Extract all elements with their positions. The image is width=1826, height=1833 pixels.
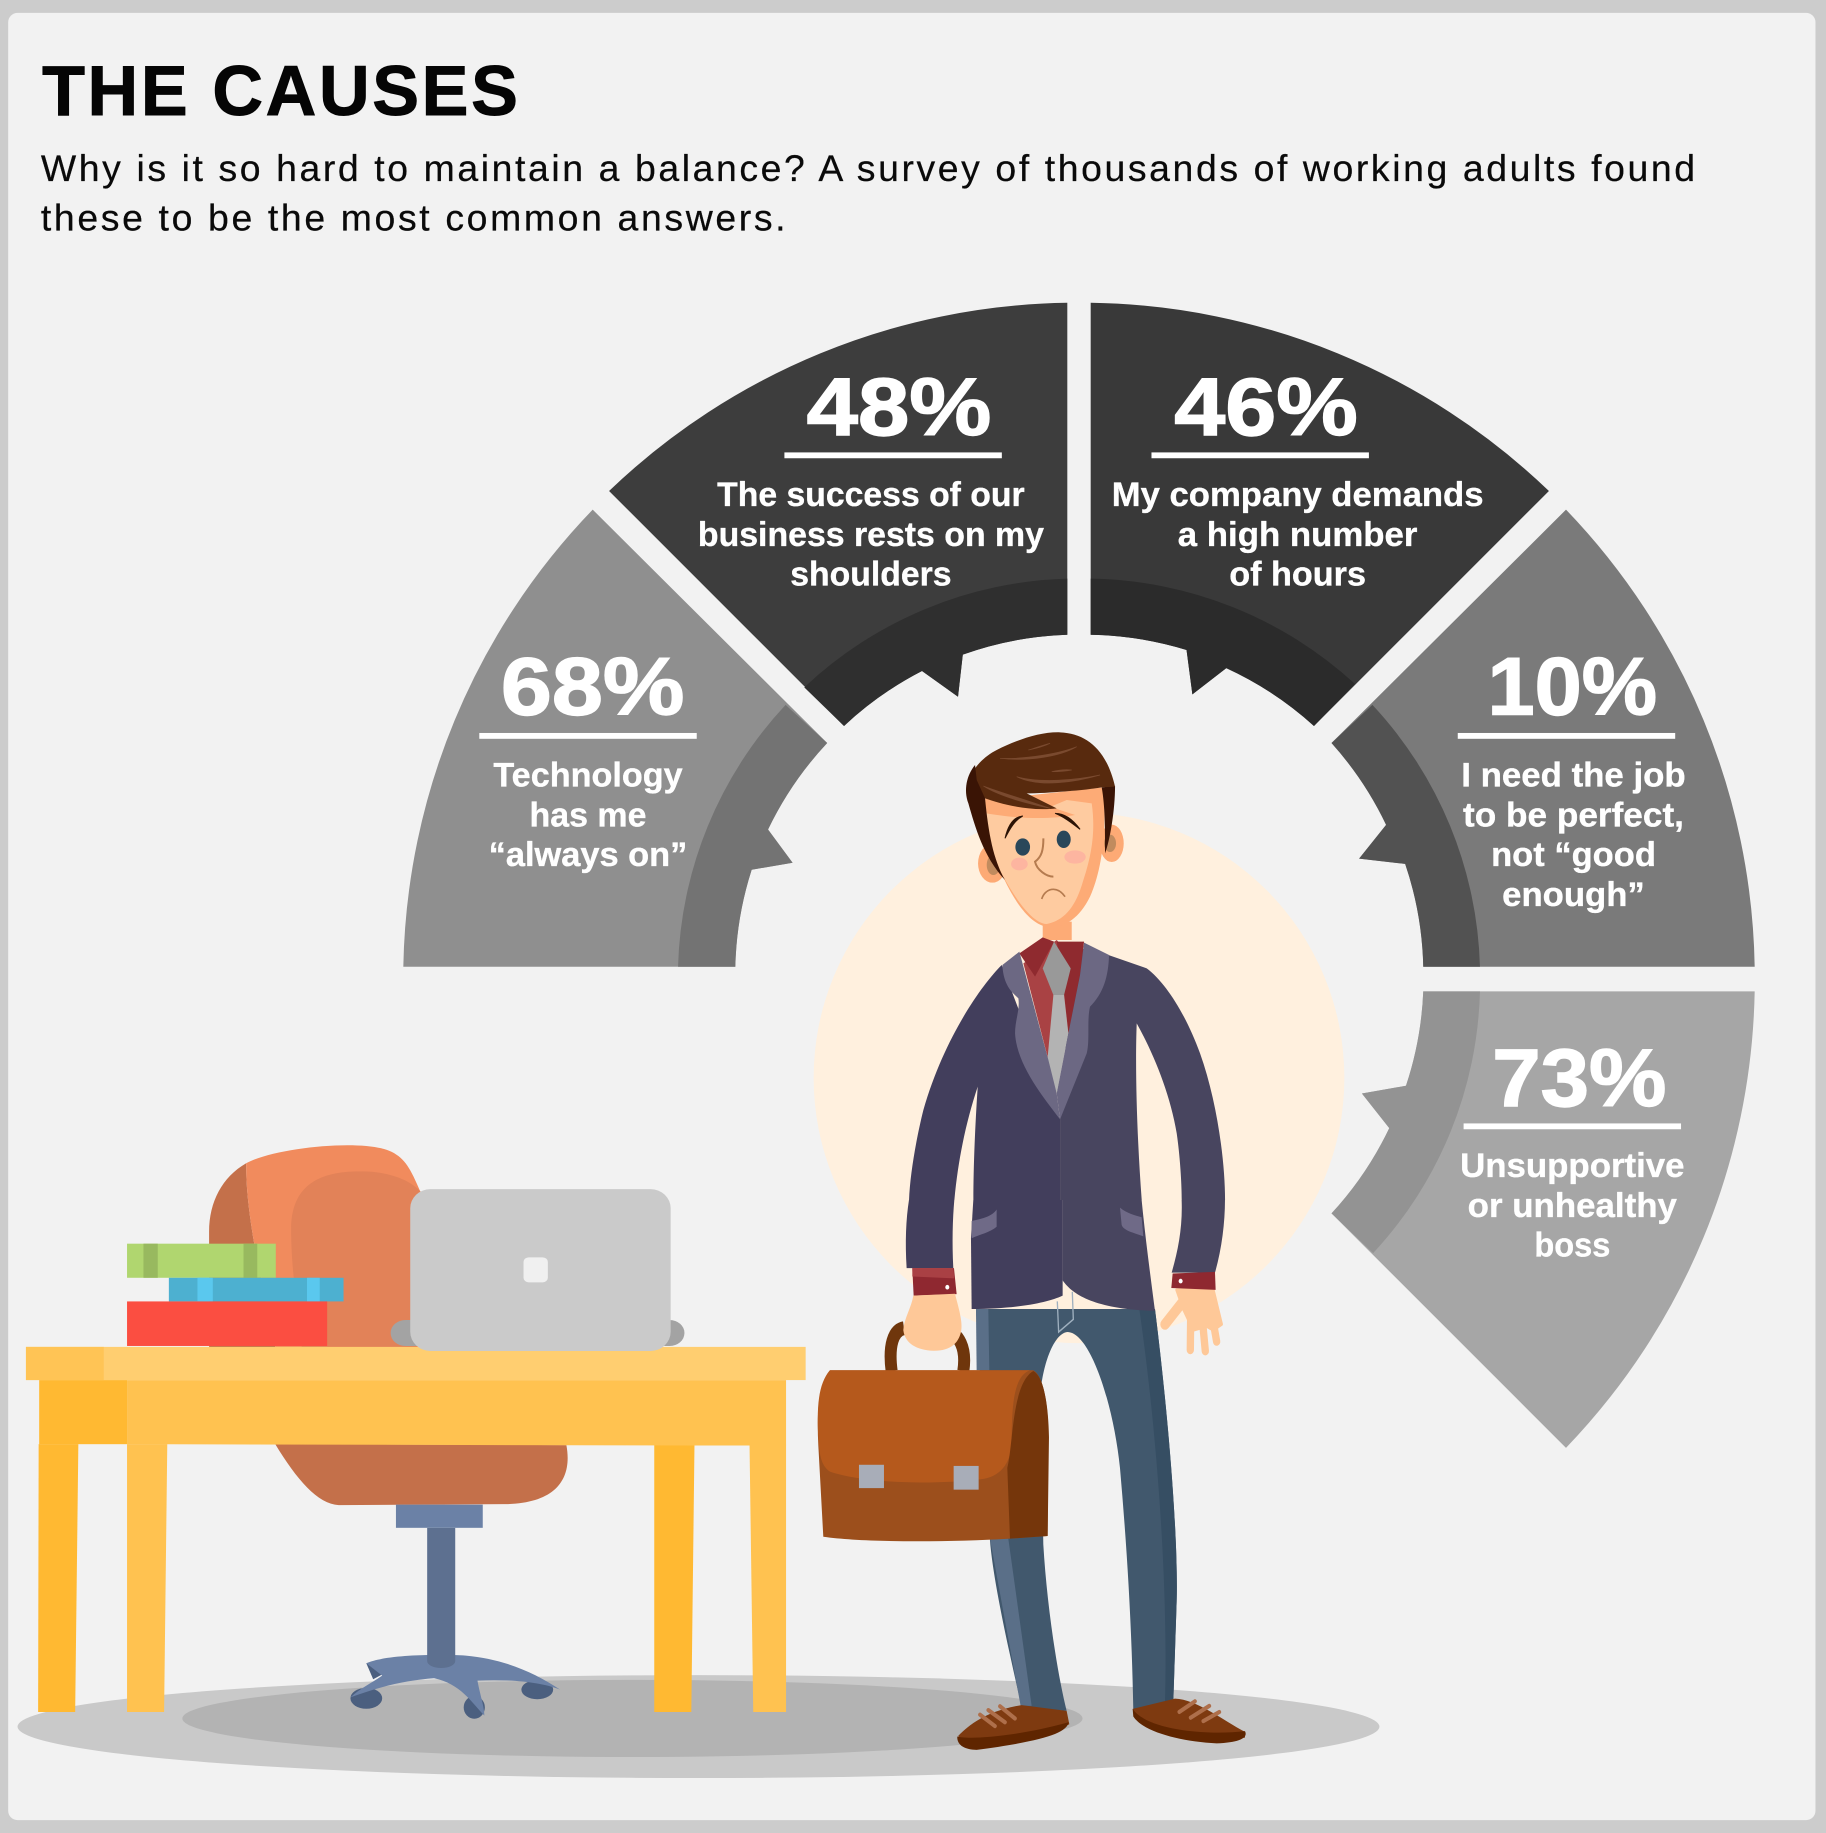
segment: 68%: has me: [530, 796, 646, 834]
segment: 73%: boss: [1534, 1227, 1610, 1265]
segment: 73%: or unhealthy: [1468, 1187, 1677, 1225]
segment: 68%: “always on”: [489, 836, 687, 874]
floor shadow: [18, 1675, 1379, 1778]
segment: 10%: to be perfect,: [1463, 796, 1684, 834]
shirt and tie: [1019, 937, 1084, 1093]
segment: 46%: a high number: [1178, 516, 1417, 554]
segment: 48%: The success of our: [717, 476, 1025, 514]
desk: [26, 1347, 806, 1712]
ears: [978, 825, 1124, 883]
segment: 68%: Technology: [493, 757, 683, 795]
right hand: [1165, 1290, 1222, 1351]
segment: 73%: Unsupportive: [1460, 1147, 1685, 1185]
jacket lower part: [906, 1200, 1225, 1311]
briefcase: [818, 1294, 1049, 1541]
segment: 10%: enough”: [1502, 876, 1645, 914]
title: THE CAUSES: [42, 52, 518, 130]
trousers: [976, 1292, 1177, 1711]
segment: 73%: 73%: [1492, 1033, 1666, 1124]
segment: 46%: [1091, 303, 1549, 726]
intro text: Why is it so hard to maintain a balance? A survey of thousands of working adults found: [41, 147, 1695, 189]
illustration: man legs, bag, hands: [818, 1200, 1246, 1750]
lapels: [1002, 943, 1109, 1119]
neck: [1043, 922, 1072, 940]
books: [127, 1244, 344, 1346]
intro text: [41, 147, 1695, 238]
segment: 10%: not “good: [1491, 836, 1656, 874]
segment: 46%: of hours: [1229, 556, 1366, 594]
segment: 46%: My company demands: [1112, 476, 1483, 514]
shoes: [957, 1699, 1246, 1750]
segment: 48%: 48%: [807, 362, 991, 453]
segment: 73%: [1332, 991, 1755, 1448]
segment: 68%: [403, 510, 827, 967]
segment: 46%: 46%: [1174, 362, 1358, 453]
illustration: man upper body and head: [909, 732, 1225, 1200]
jacket: [909, 947, 1225, 1200]
intro text: these to be the most common answers.: [41, 196, 786, 238]
segment: 10%: I need the job: [1461, 757, 1686, 795]
hair: [966, 732, 1115, 880]
segment: 48%: [609, 303, 1067, 726]
office chair: [209, 1145, 568, 1719]
cuffs: [912, 1268, 1216, 1296]
segment: 10%: 10%: [1488, 641, 1657, 732]
face: [985, 787, 1104, 927]
laptop: [391, 1189, 684, 1351]
segment: 48%: shoulders: [790, 556, 952, 594]
peach circle behind man: [814, 812, 1344, 1343]
illustration: desk scene: [26, 1145, 806, 1719]
segment: 10%: [1332, 510, 1755, 967]
segment: 48%: business rests on my: [698, 516, 1044, 554]
segment: 68%: 68%: [501, 641, 684, 732]
